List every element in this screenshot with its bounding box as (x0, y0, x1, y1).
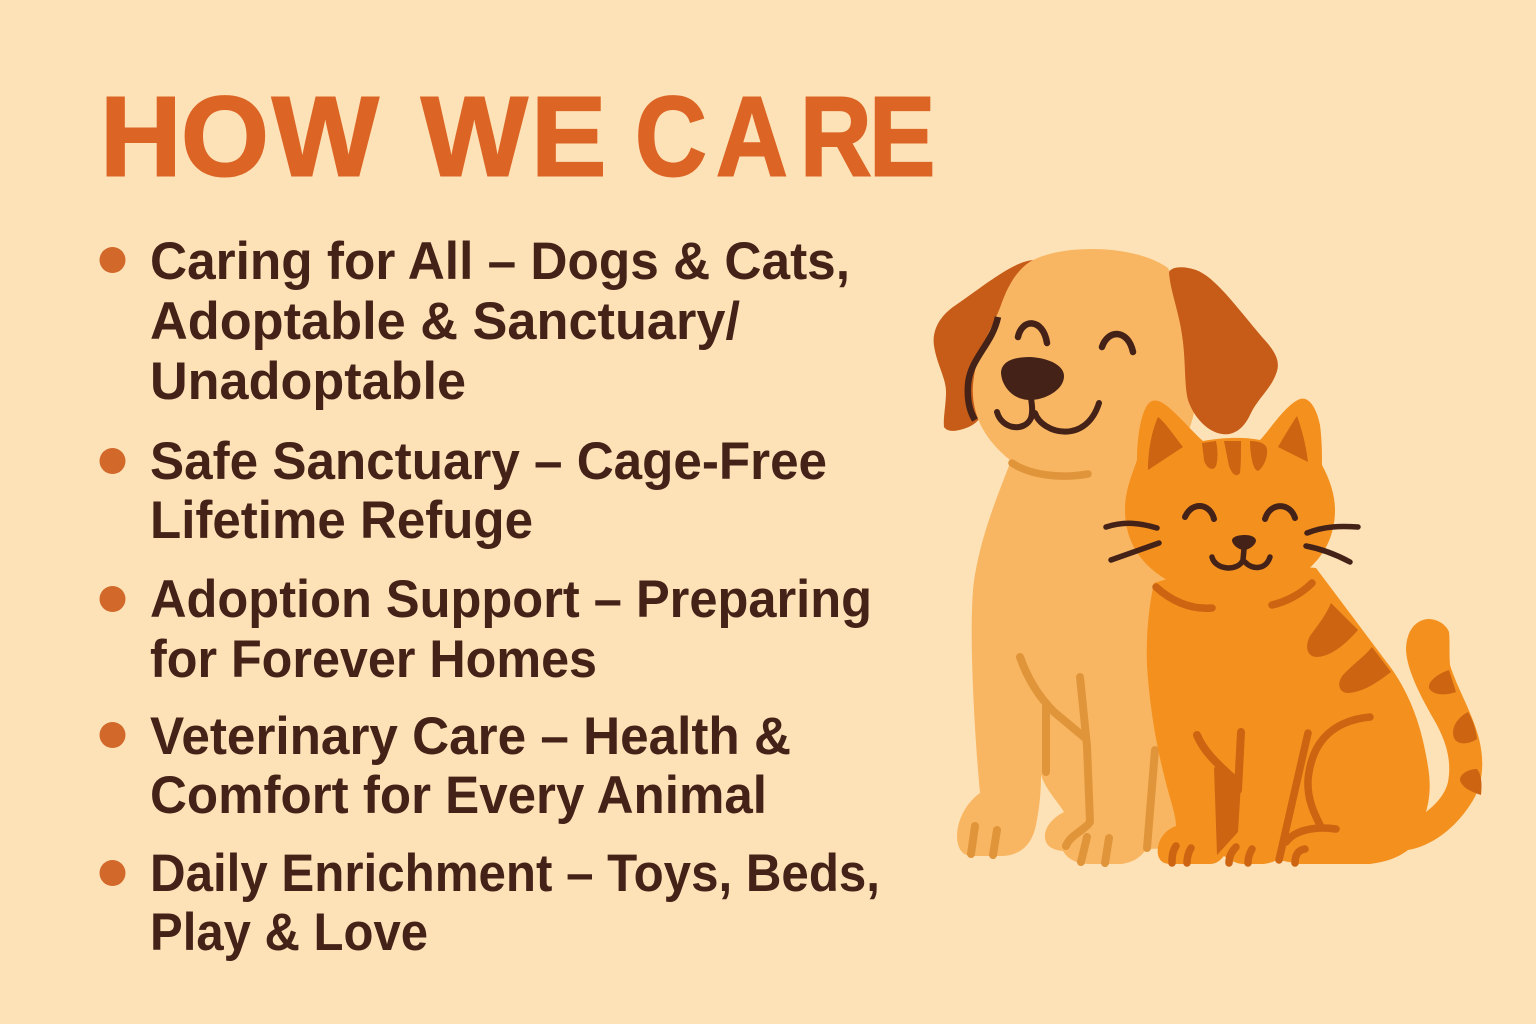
illustration: dog and cat (934, 249, 1482, 864)
list item: safe sanctuary: Lifetime Refuge (150, 491, 533, 550)
cat haunch lines (1172, 717, 1370, 863)
cat neck lines (1156, 583, 1312, 608)
title (100, 74, 935, 200)
dog ear outline (968, 317, 998, 420)
title: CARE (635, 74, 935, 200)
cat inner ears (1148, 416, 1308, 470)
bullet list (100, 232, 880, 962)
dog nose (1001, 357, 1064, 400)
dog head (973, 249, 1196, 484)
list item: adoption support: Adoption Support – Preparing (150, 570, 872, 629)
list item: caring for all (100, 232, 850, 411)
icon: cat (1106, 399, 1482, 864)
list item: adoption support (100, 570, 872, 689)
list item: daily enrichment (100, 844, 880, 962)
title: WE (421, 74, 606, 200)
dog mouth (997, 398, 1099, 432)
icon: dog (934, 249, 1278, 864)
cat eyes (1185, 506, 1295, 519)
cat body stripes (1307, 603, 1482, 795)
title: HOW (100, 74, 379, 200)
cat forehead stripes (1202, 441, 1267, 475)
dog collar (1012, 463, 1088, 476)
cat head and ears (1125, 399, 1335, 593)
dog body (957, 450, 1210, 864)
list item: caring for all: Adoptable & Sanctuary/ (150, 292, 740, 351)
list item: daily enrichment: Daily Enrichment – Toys, Beds, (150, 844, 880, 903)
dog eyes (1018, 323, 1133, 352)
cat whiskers (1106, 523, 1358, 562)
list item: safe sanctuary: Safe Sanctuary – Cage-Free (150, 432, 827, 491)
list item: safe sanctuary (100, 432, 827, 550)
list item: daily enrichment: Play & Love (150, 903, 428, 962)
dog right ear (1169, 267, 1278, 434)
list item: caring for all: Unadoptable (150, 352, 466, 411)
list item: veterinary care: Comfort for Every Animal (150, 766, 767, 825)
cat mouth (1212, 549, 1270, 568)
cat body and tail (1147, 560, 1482, 864)
list item: veterinary care: Veterinary Care – Health & (150, 707, 791, 766)
list item: veterinary care (100, 707, 791, 825)
list item: caring for all: Caring for All – Dogs & Cats, (150, 232, 850, 291)
cat front legs (1197, 732, 1241, 790)
dog leg lines and toes (971, 657, 1155, 863)
cat nose (1232, 535, 1256, 550)
dog left ear (934, 260, 1033, 431)
list item: adoption support: for Forever Homes (150, 630, 597, 689)
